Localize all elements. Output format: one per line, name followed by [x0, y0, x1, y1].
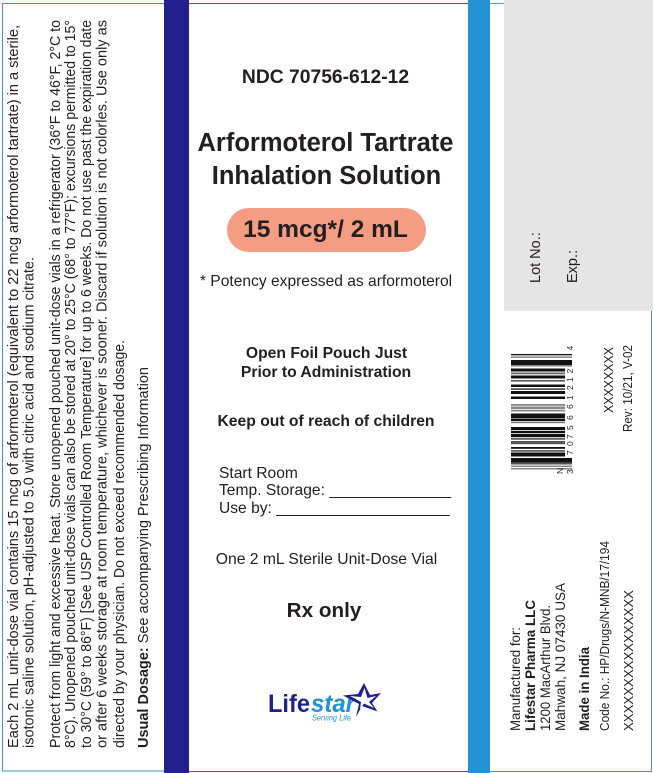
text: barcode digits: 1 [565, 395, 575, 400]
text: code and revision [601, 345, 635, 432]
callout: strength pill [227, 208, 426, 252]
logo: Lifestar: star [311, 690, 356, 718]
text block: storage instructions: or after 6 weeks storage at room temperature, whichever is sooner. Discard if solution is not colorles. Use only as [94, 20, 110, 748]
title: drug name: Arformoterol Tartrate [198, 129, 453, 157]
title: drug name [198, 129, 453, 190]
panel: lot and expiry box [504, 0, 653, 311]
text: barcode digits: 6 [565, 404, 575, 409]
barcode [511, 346, 575, 474]
text: barcode digits: 7 [565, 450, 575, 455]
panel: left information panel [2, 4, 166, 771]
text: barcode digits: 1 [565, 377, 575, 382]
text block: composition [6, 25, 38, 748]
title: drug name: Inhalation Solution [212, 162, 441, 190]
text block: manufacturer: Made in India [576, 647, 592, 731]
text block: manufacturer: Mahwah, NJ 07430 USA [552, 582, 568, 731]
text block: usual dosage: Usual Dosage: See accompanying Prescribing Information [136, 367, 152, 748]
text block: storage instructions: 8°C). Unopened pouched unit-dose vials can also be stored at 20° to 25°C (68° to 77°F); excursions permitted to 15° [63, 20, 79, 748]
text: code and revision: Rev: 10/21, V-02 [620, 345, 635, 432]
text block: storage fields: Start Room [219, 465, 298, 482]
text block: storage instructions: Protect from light and excessive heat. Store unopened pouched unit-dose vials in a refrigerator (36°F to 46°F, 2°C to [48, 20, 64, 748]
text block: storage instructions [48, 20, 128, 748]
panel border right [651, 311, 652, 772]
text: barcode digits: 2 [565, 368, 575, 374]
text: code number: Code No.: HP/Drugs/N-MNB/17/194 [597, 541, 612, 731]
text: barcode digits: 0 [565, 441, 575, 446]
text: potency note: * Potency expressed as arformoterol [200, 273, 452, 290]
text: barcode digits: 5 [565, 425, 575, 430]
text: open foil pouch: Prior to Administration [241, 364, 411, 381]
text: open foil pouch [241, 345, 411, 381]
text: barcode digits: 3 [565, 469, 575, 474]
logo: Lifestar: Life [268, 690, 310, 718]
text block: storage fields: Use by: ____________________ [219, 500, 450, 517]
text: barcode digits: 2 [565, 385, 575, 390]
text block: manufacturer [507, 582, 592, 731]
heading: NDC: NDC 70756-612-12 [242, 67, 409, 88]
text: barcode digits: N [555, 468, 565, 474]
panel border bottom [490, 771, 652, 772]
text block: composition: Each 2 mL unit-dose vial contains 15 mcg of arformoterol (equivalent to 22 mcg arformoterol tartrate) in a sterile, [6, 25, 22, 748]
text: placeholder code: XXXXXXXXXXXXXXXX [621, 590, 636, 731]
text: barcode digits [555, 346, 575, 474]
text: barcode digits: 7 [565, 434, 575, 439]
text block: storage instructions: directed by your physician. Do not exceed recommended dosage. [112, 340, 128, 748]
callout: strength pill: 15 mcg*/ 2 mL [243, 216, 408, 243]
text: code and revision: XXXXXXXX [601, 347, 616, 413]
text: barcode digits: 6 [565, 415, 575, 420]
panel: lot and expiry box: Exp.: [565, 250, 581, 283]
text block: storage instructions: to 30°C (59° to 86°F) [See USP Controlled Room Temperature] for up to 6 weeks. Do not use past the expiration date [79, 20, 95, 748]
logo: Lifestar [268, 683, 381, 722]
text: open foil pouch: Open Foil Pouch Just [246, 345, 408, 362]
text: Rx only: Rx only [287, 599, 362, 622]
text block: manufacturer: 1200 MacArthur Blvd. [537, 605, 553, 731]
icon: star [343, 683, 381, 717]
text: unit-dose vial: One 2 mL Sterile Unit-Dose Vial [216, 551, 437, 568]
text: barcode digits: 4 [565, 346, 575, 350]
panel border lines [189, 3, 504, 772]
text block: composition: isotonic saline solution, pH-adjusted to 5.0 with citric acid and sodium citrate. [22, 257, 38, 748]
logo: Lifestar: Serving Life [312, 712, 351, 722]
band: navy stripe [164, 0, 189, 773]
text block: manufacturer: Manufactured for: [507, 627, 523, 731]
text: keep out of reach: Keep out of reach of children [217, 413, 435, 430]
panel: lot and expiry box: Lot No.: [528, 232, 544, 283]
text block: manufacturer: Lifestar Pharma LLC [522, 600, 538, 731]
text block: storage fields [219, 465, 451, 517]
band: blue stripe [468, 0, 490, 773]
text block: storage fields: Temp. Storage: ______________ [219, 482, 451, 499]
